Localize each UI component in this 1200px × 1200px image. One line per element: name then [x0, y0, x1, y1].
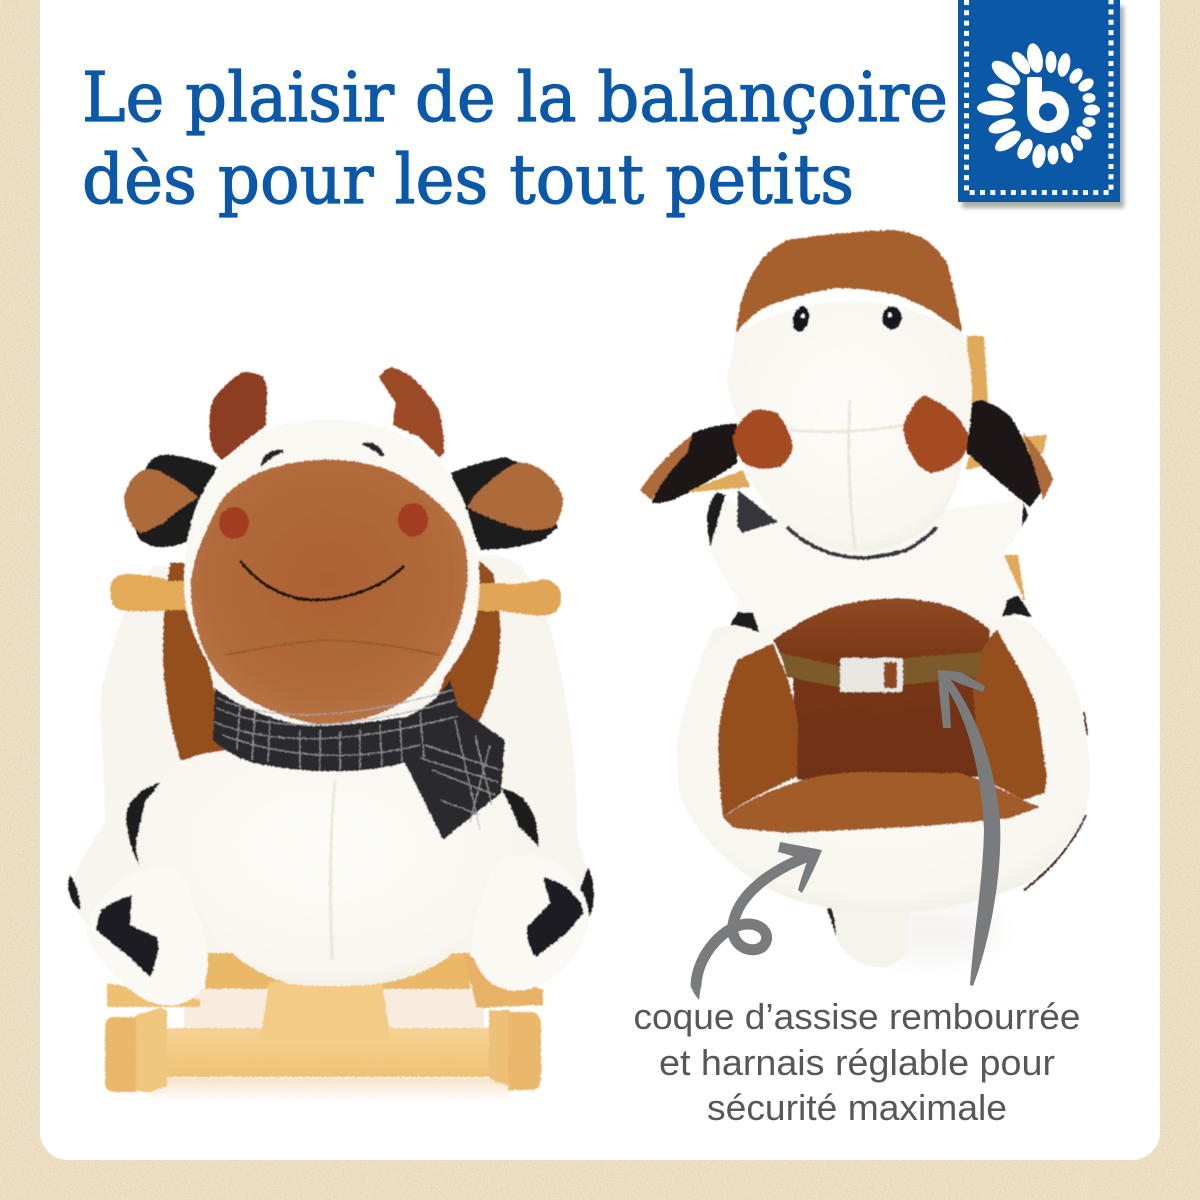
seat shell [677, 618, 1090, 912]
horns [209, 367, 444, 460]
body seam [331, 780, 335, 960]
plaid neck [737, 490, 778, 533]
caption: sécurité maximale [707, 1087, 1007, 1128]
right leg [472, 855, 589, 991]
title: Le plaisir de la balançoire [82, 59, 948, 138]
muzzle fold [225, 640, 440, 655]
scarf [213, 680, 505, 840]
title: dès pour les tout petits [82, 141, 854, 220]
illustration: rocking cow top view with seat [640, 230, 1090, 967]
brown cap [736, 230, 962, 333]
wood handle pieces [682, 336, 1047, 600]
caption: coque d’assise rembourrée [634, 996, 1080, 1037]
caption: et harnais réglable pour [659, 1042, 1055, 1083]
body [139, 745, 514, 986]
title [82, 59, 948, 220]
eyes [263, 444, 383, 463]
wooden rocker base [105, 949, 543, 1102]
seat interior [718, 598, 1047, 833]
brown seat back [163, 561, 500, 760]
arrow: to padded shell [691, 842, 822, 1000]
tail [829, 905, 910, 967]
head seam [790, 400, 905, 550]
head [727, 301, 972, 552]
ears [124, 455, 563, 550]
wooden handle [110, 574, 561, 616]
caption [634, 996, 1080, 1128]
nostrils [219, 503, 428, 539]
smile [241, 562, 403, 600]
harness [780, 652, 982, 692]
arrow: to harness [938, 670, 1000, 986]
logo: bébé tag [958, 0, 1124, 208]
upper body [710, 500, 1023, 640]
horns from above [733, 395, 968, 473]
spots behind body [126, 782, 539, 865]
back spots [707, 492, 1028, 547]
white shell [71, 555, 592, 953]
shell edge dark trim [1024, 712, 1087, 890]
collar [787, 527, 937, 558]
muzzle [191, 460, 468, 724]
eyes [790, 305, 902, 333]
floor shadow [860, 900, 1000, 960]
side spots [68, 867, 594, 917]
illustration: rocking cow front view [68, 367, 594, 1102]
head [184, 420, 479, 715]
left leg [86, 868, 208, 1006]
ears [640, 400, 1053, 507]
black patches [730, 595, 1032, 633]
